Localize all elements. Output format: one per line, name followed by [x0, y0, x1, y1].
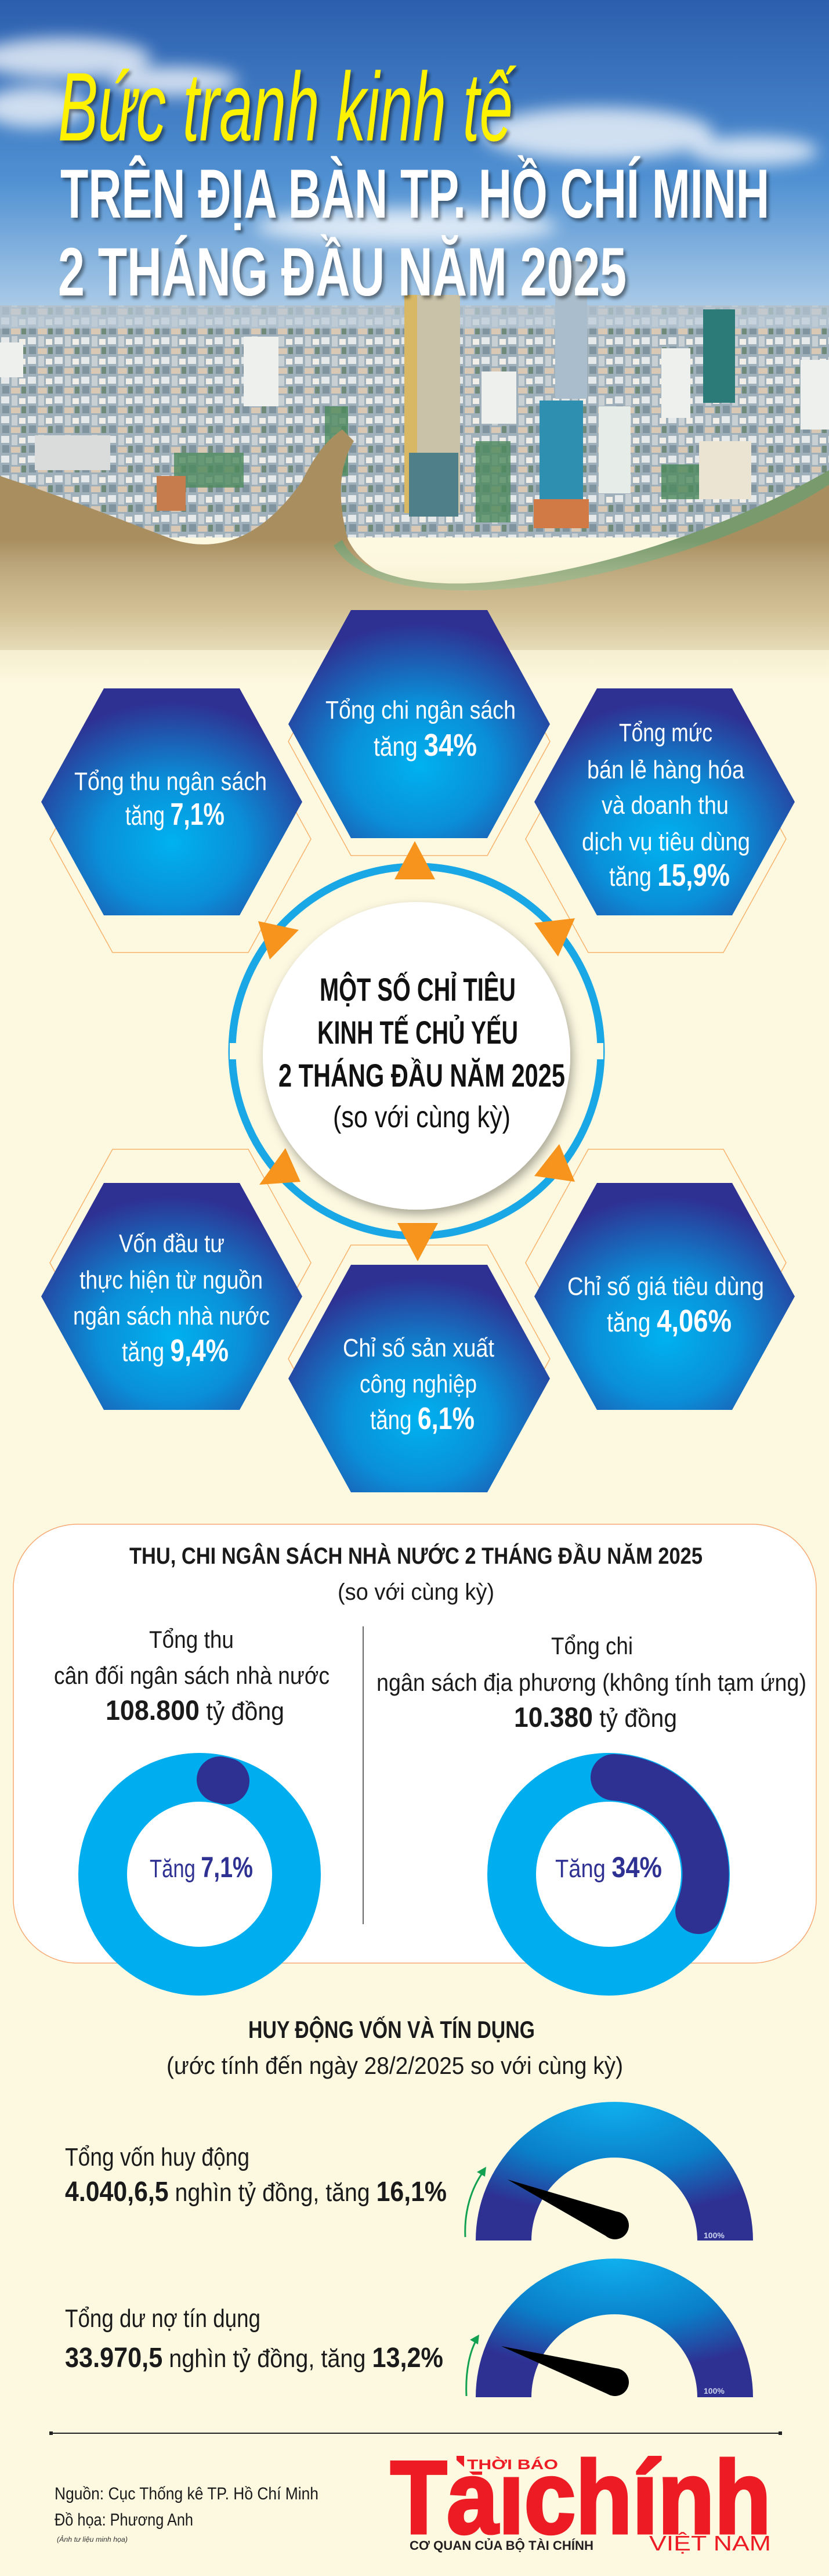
- center circle heading: (so với cùng kỳ): [333, 1101, 511, 1134]
- text: tổng vốn huy động: [65, 2143, 447, 2207]
- donut chart: tổng thu 7,1%: Tăng 7,1%: [150, 1851, 253, 1884]
- center circle heading: KINH TẾ CHỦ YẾU: [317, 1014, 518, 1051]
- heading: huy động vốn: [166, 2015, 623, 2079]
- panel heading: (so với cùng kỳ): [338, 1579, 494, 1605]
- hexagon: Tổng mức bán lẻ: và doanh thu: [602, 791, 729, 820]
- left text: tổng thu: Tổng thu: [149, 1626, 234, 1653]
- hexagon: Tổng thu ngân sách: tăng 7,1%: [125, 797, 225, 832]
- title: [58, 52, 769, 311]
- left text: tổng thu: [54, 1626, 330, 1726]
- heading: huy động vốn: HUY ĐỘNG VỐN VÀ TÍN DỤNG: [248, 2015, 535, 2043]
- hexagon: Tổng mức bán lẻ: bán lẻ hàng hóa: [587, 756, 744, 784]
- hexagon: Chỉ số sản xuất công nghiệp: công nghiệp: [360, 1370, 477, 1398]
- logo: Thời báo Tài chính Việt Nam: THỜI BÁO: [467, 2456, 558, 2473]
- icon: green arrow 1: [465, 2167, 486, 2237]
- source credits: [55, 2484, 318, 2543]
- river: [0, 430, 829, 650]
- panel heading: [129, 1542, 703, 1605]
- gauge 1: [476, 2102, 753, 2241]
- hexagon: Chỉ số sản xuất công nghiệp: tăng 6,1%: [370, 1401, 475, 1436]
- text: tổng dư nợ: Tổng dư nợ tín dụng: [65, 2304, 260, 2333]
- hexagon: Tổng thu ngân sách: Tổng thu ngân sách: [74, 767, 267, 796]
- icon: green arrow 2: [466, 2335, 479, 2396]
- right text: tổng chi: [377, 1632, 806, 1733]
- text: tổng vốn huy động: 4.040,6,5 nghìn tỷ đồng, tăng 16,1%: [65, 2177, 447, 2207]
- gauge 2: 100%: [704, 2386, 725, 2395]
- hexagon: Tổng mức bán lẻ: tăng 15,9%: [609, 858, 730, 893]
- hexagon outlines (decorative offsets): [50, 627, 786, 1473]
- donut chart: tổng chi 34%: [512, 1777, 705, 1971]
- gauge 1: 100%: [704, 2231, 725, 2240]
- logo: Thời báo Tài chính Việt Nam: Tàichính: [390, 2440, 771, 2555]
- hexagon: Vốn đầu tư: Vốn đầu tư: [119, 1229, 225, 1258]
- center ring: [230, 867, 603, 1236]
- hexagon: Chỉ số giá tiêu dùng: tăng 4,06%: [607, 1304, 732, 1338]
- logo: Thời báo Tài chính Việt Nam: VIỆT NAM: [649, 2531, 771, 2555]
- hexagon: Vốn đầu tư: [41, 1183, 302, 1410]
- source credits: Nguồn: Cục Thống kê TP. Hồ Chí Minh: [55, 2484, 318, 2503]
- hexagon: Tổng chi ngân sách: Tổng chi ngân sách: [325, 696, 516, 724]
- hexagon: Tổng mức bán lẻ: Tổng mức: [619, 719, 712, 747]
- left text: tổng thu: 108.800 tỷ đồng: [106, 1695, 284, 1726]
- text: tổng dư nợ: [65, 2304, 443, 2373]
- center circle heading: MỘT SỐ CHỈ TIÊU: [320, 971, 516, 1008]
- header photo: [0, 0, 829, 685]
- logo: Thời báo Tài chính Việt Nam: CƠ QUAN CỦA BỘ TÀI CHÍNH: [410, 2538, 593, 2553]
- panel heading: THU, CHI NGÂN SÁCH NHÀ NƯỚC 2 THÁNG ĐẦU NĂM 2025: [129, 1542, 703, 1569]
- hexagon: Vốn đầu tư: tăng 9,4%: [122, 1333, 229, 1368]
- source credits: Đồ họa: Phương Anh: [55, 2510, 193, 2530]
- right text: tổng chi: 10.380 tỷ đồng: [514, 1702, 677, 1733]
- hexagon: Tổng chi ngân sách: [288, 610, 550, 838]
- title: Bức tranh kinh tế: [58, 52, 517, 161]
- left text: tổng thu: cân đối ngân sách nhà nước: [54, 1662, 330, 1689]
- hexagon: Tổng mức bán lẻ: [534, 688, 795, 915]
- hexagon: Tổng thu ngân sách: [41, 688, 302, 915]
- text: tổng vốn huy động: Tổng vốn huy động: [65, 2143, 249, 2171]
- gauge 2: [476, 2258, 753, 2397]
- hexagon: Vốn đầu tư: thực hiện từ nguồn: [79, 1266, 263, 1294]
- hexagon: Tổng chi ngân sách: tăng 34%: [374, 728, 477, 763]
- heading: huy động vốn: (ước tính đến ngày 28/2/2025 so với cùng kỳ): [166, 2052, 623, 2079]
- hexagon: Tổng mức bán lẻ: dịch vụ tiêu dùng: [582, 828, 750, 856]
- text: tổng dư nợ: 33.970,5 nghìn tỷ đồng, tăng 13,2%: [65, 2343, 443, 2373]
- donut chart: tổng chi 34%: Tăng 34%: [555, 1851, 662, 1884]
- hexagon: Vốn đầu tư: ngân sách nhà nước: [73, 1302, 270, 1330]
- center circle heading: 2 THÁNG ĐẦU NĂM 2025: [278, 1057, 565, 1094]
- panel: thu chi ngan sach: [13, 1524, 816, 1963]
- arrows: orange triangles: [258, 841, 575, 1261]
- source credits: (Ảnh tư liệu minh họa): [57, 2535, 128, 2543]
- donut chart: tổng thu 7,1%: [103, 1777, 296, 1971]
- hexagon: Chỉ số sản xuất công nghiệp: Chỉ số sản xuất: [343, 1334, 494, 1362]
- hexagon: Chỉ số sản xuất công nghiệp: [288, 1265, 550, 1492]
- hexagon: Chỉ số giá tiêu dùng: Chỉ số giá tiêu dùng: [567, 1272, 764, 1301]
- hexagon: Chỉ số giá tiêu dùng: [534, 1183, 795, 1410]
- right text: tổng chi: Tổng chi: [551, 1632, 633, 1659]
- center circle heading: [263, 902, 570, 1210]
